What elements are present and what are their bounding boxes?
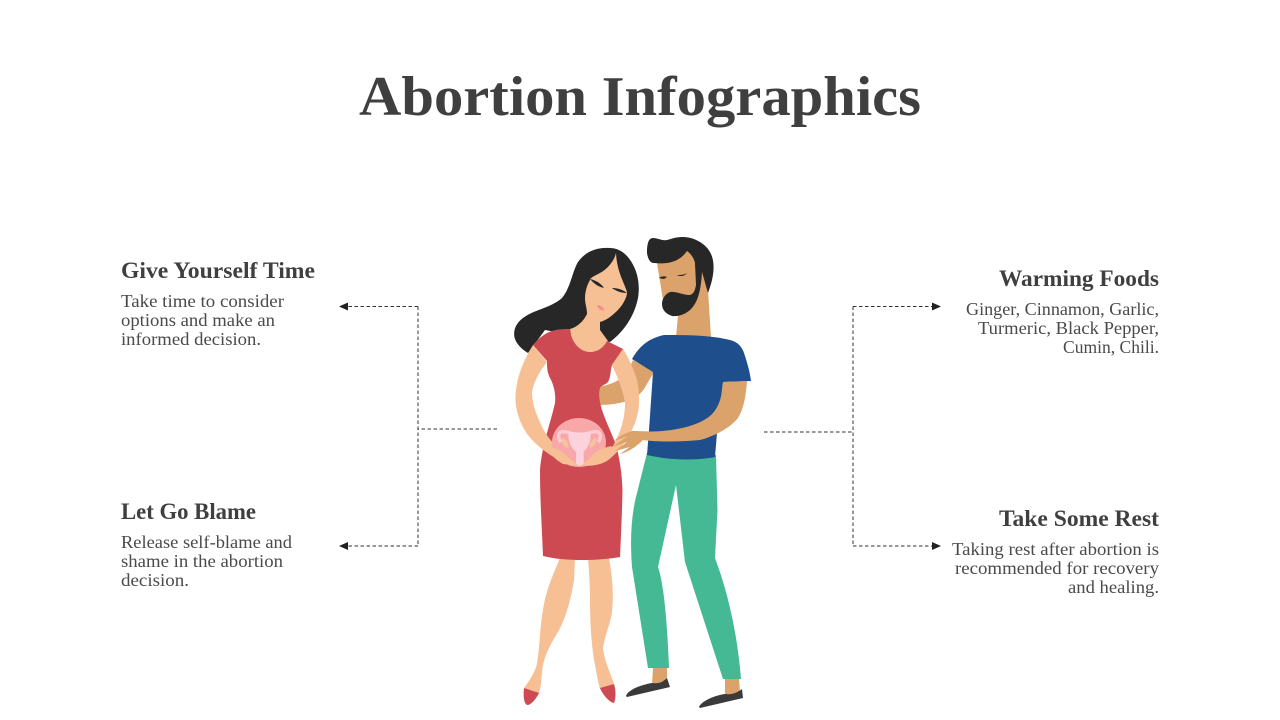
man's ankles [652,668,740,698]
uterus graphic [552,418,606,467]
body: Warming Foods: Cumin, Chili. [1063,337,1159,357]
text block: Warming Foods [966,266,1159,357]
body: Give Yourself Time: options and make an [121,310,275,330]
woman [514,248,639,705]
text block: Give Yourself Time [121,258,315,349]
man's shoes [626,678,743,708]
woman's arms [515,345,639,466]
woman's eyes and lips [590,279,627,293]
man's hair [647,237,714,293]
body: Give Yourself Time: Take time to consider [121,291,284,311]
body: Warming Foods: Turmeric, Black Pepper, [978,318,1159,338]
man's back arm [598,360,654,405]
belly circle [552,418,606,467]
woman's hair [514,248,639,353]
heading: Let Go Blame: Let Go Blame [121,499,256,524]
woman's dress [533,329,623,560]
man's front arm and hand [612,381,747,454]
body: Take Some Rest: and healing. [1068,577,1159,597]
uterus body [568,431,591,466]
body: Give Yourself Time: informed decision. [121,329,261,349]
woman's face and neck [570,253,627,352]
woman's hands on belly [549,446,611,466]
body: Take Some Rest: Taking rest after abortion is [952,539,1159,559]
illustration: couple [514,237,751,708]
right dashed connector with arrows [764,302,941,550]
body: Warming Foods: Ginger, Cinnamon, Garlic, [966,299,1159,319]
heading: Take Some Rest: Take Some Rest [999,506,1159,531]
text block: Take Some Rest [952,506,1159,597]
body: Take Some Rest: recommended for recovery [955,558,1159,578]
man's neck and face [657,250,711,337]
body: Let Go Blame: decision. [121,570,189,590]
text block: Let Go Blame [121,499,292,590]
man's eyes [659,273,687,279]
man's beard [662,263,702,316]
body: Let Go Blame: Release self-blame and [121,532,292,552]
heading: Warming Foods: Warming Foods [999,266,1159,291]
man [626,237,751,708]
title: Abortion Infographics [359,66,921,128]
man's shirt [632,335,751,459]
body: Warming Foods [966,299,1159,357]
woman's shoes [524,684,616,705]
ovaries [562,438,596,448]
body: Let Go Blame: shame in the abortion [121,551,283,571]
body: Give Yourself Time [121,291,284,349]
left dashed connector with arrows [339,302,497,550]
woman's legs [524,558,614,694]
man's trousers [631,453,741,679]
body: Let Go Blame [121,532,292,590]
body: Take Some Rest [952,539,1159,597]
uterus tubes [559,432,600,442]
heading: Give Yourself Time: Give Yourself Time [121,258,315,283]
